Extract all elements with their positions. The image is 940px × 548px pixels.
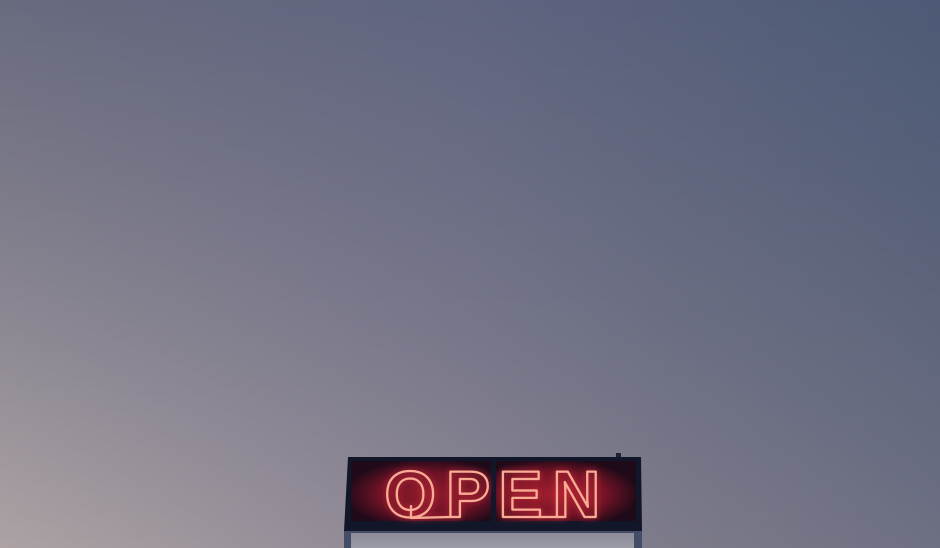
small fixture on the sign's top edge (616, 453, 621, 457)
building wall below the sign (344, 530, 642, 548)
neon word (384, 457, 600, 531)
sign box (344, 453, 642, 531)
left red panel (351, 461, 491, 521)
sign frame (344, 457, 642, 531)
neon letters: OPEN (384, 457, 600, 531)
neon connector tubes (411, 506, 558, 518)
right red panel (496, 461, 636, 521)
